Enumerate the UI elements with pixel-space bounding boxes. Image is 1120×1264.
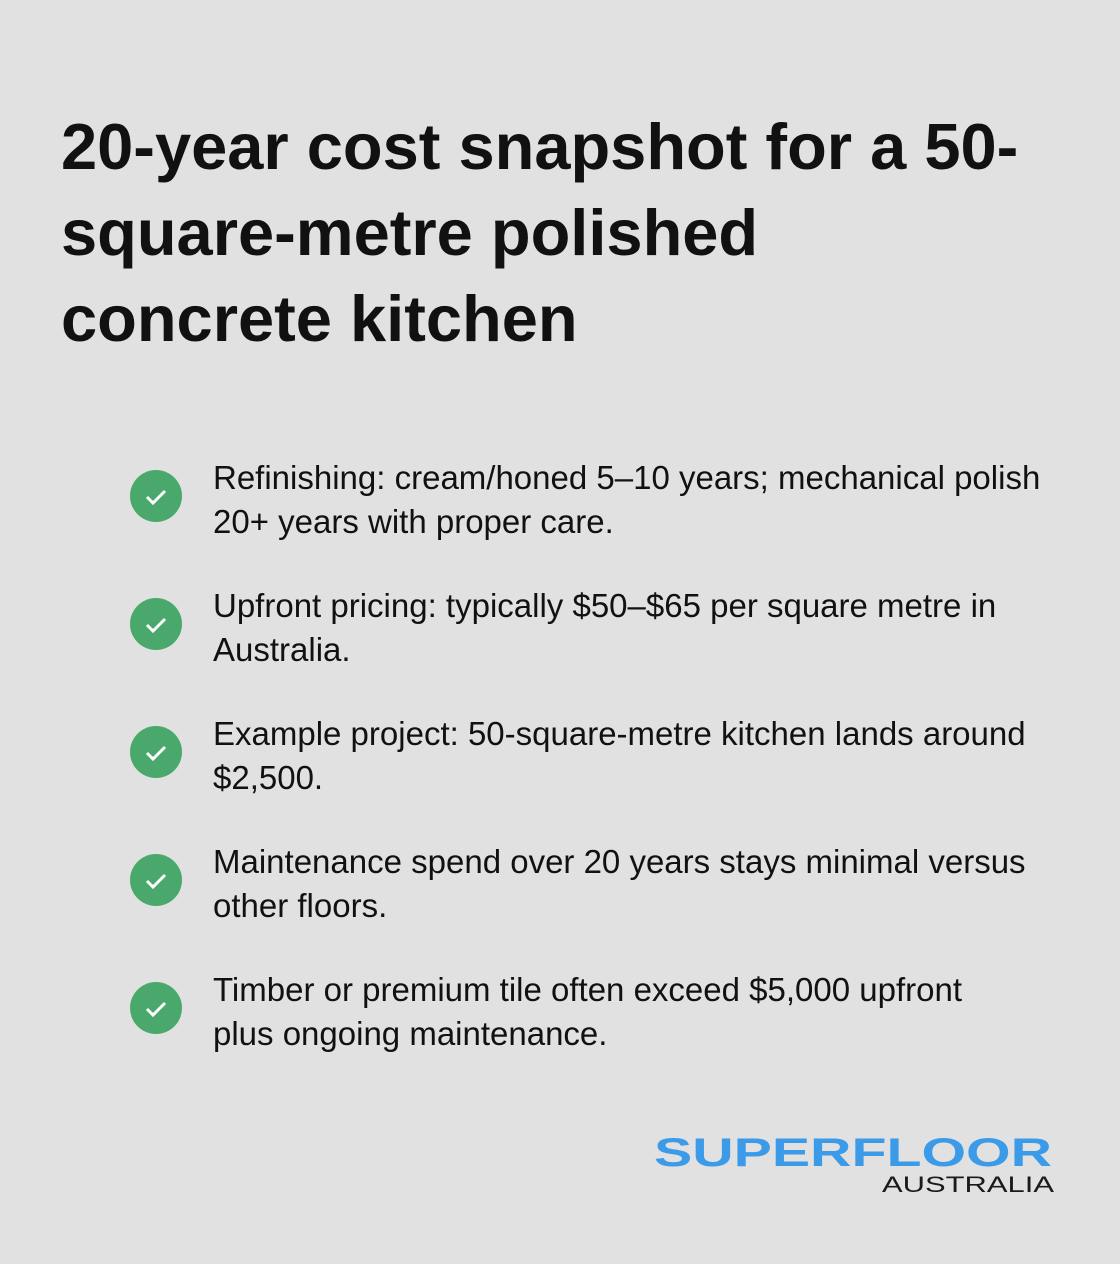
- text 3: $2,500.: [213, 759, 323, 796]
- text 5: plus ongoing maintenance.: [213, 1015, 607, 1052]
- text 2: Upfront pricing: typically $50–$65 per square metre in: [213, 587, 996, 624]
- text 3: Example project: 50-square-metre kitchen lands around: [213, 715, 1026, 752]
- title: 20-year cost snapshot for a 50-: [61, 110, 1018, 183]
- text 2: Australia.: [213, 631, 351, 668]
- icon: check: [130, 854, 182, 906]
- text 2: [213, 587, 996, 668]
- text 4: Maintenance spend over 20 years stays minimal versus: [213, 843, 1026, 880]
- text 1: Refinishing: cream/honed 5–10 years; mechanical polish: [213, 459, 1040, 496]
- text 4: other floors.: [213, 887, 387, 924]
- item 2: [130, 587, 996, 668]
- text 4: [213, 843, 1026, 924]
- title: concrete kitchen: [61, 282, 578, 355]
- item 4: [130, 843, 1026, 924]
- text 5: Timber or premium tile often exceed $5,000 upfront: [213, 971, 962, 1008]
- title: [61, 110, 1018, 355]
- item 1: [130, 459, 1040, 540]
- icon: check: [130, 726, 182, 778]
- logo: SUPERFLOOR: [654, 1132, 1052, 1175]
- item 5: [130, 971, 962, 1052]
- text 1: [213, 459, 1040, 540]
- icon: check: [130, 470, 182, 522]
- icon: check: [130, 598, 182, 650]
- icon: check: [130, 982, 182, 1034]
- text 1: 20+ years with proper care.: [213, 503, 614, 540]
- logo: AUSTRALIA: [882, 1172, 1054, 1197]
- text 3: [213, 715, 1026, 796]
- title: square-metre polished: [61, 196, 758, 269]
- logo: [654, 1132, 1054, 1197]
- item 3: [130, 715, 1026, 796]
- text 5: [213, 971, 962, 1052]
